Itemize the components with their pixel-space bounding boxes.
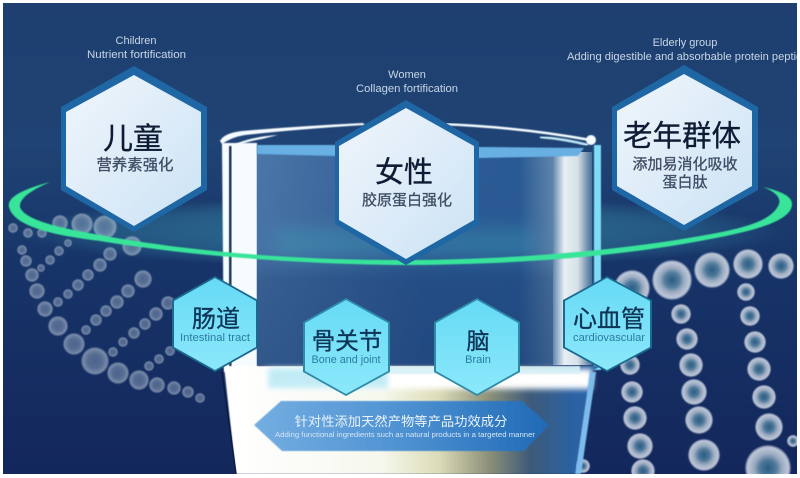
hexagon: cardiovascular: 心血管 (573, 306, 645, 333)
hexagon: bone and joint: Bone and joint (312, 354, 380, 366)
heading: women: 女性 (375, 156, 433, 189)
banner (254, 401, 549, 451)
heading: children: 儿童 (103, 123, 163, 156)
glow band behind ring (15, 196, 785, 268)
DNA helix: right (576, 249, 799, 478)
milk right wall (575, 372, 596, 474)
hexagon: bone and joint: 骨关节 (312, 328, 382, 354)
caption: elderly (567, 37, 800, 63)
heading: elderly: 老年群体 (623, 120, 741, 153)
teal haze inside glass (275, 228, 535, 258)
subheading: children: 营养素强化 (97, 156, 173, 174)
water line band (257, 145, 584, 158)
green orbit ring (9, 182, 792, 265)
DNA helix: left (8, 213, 205, 403)
hexagon: intestinal tract: Intestinal tract (180, 332, 250, 344)
banner: Adding functional ingredients such as natural products in a targeted manner (275, 432, 536, 439)
hexagon: brain: Brain (465, 354, 491, 366)
hexagon: intestinal tract: 肠道 (192, 306, 240, 333)
caption: women (356, 69, 458, 95)
banner: 针对性添加天然产物等产品功效成分 (295, 413, 507, 429)
caption: children (87, 35, 186, 61)
hexagon: brain (434, 298, 520, 396)
hexagon: cardiovascular: cardiovascular (573, 332, 645, 344)
caption: elderly: Elderly group (653, 37, 717, 49)
milk (224, 366, 600, 474)
caption: women: Women (388, 69, 426, 81)
hexagon: elderly (612, 65, 758, 231)
subheading line 2: elderly: 蛋白肽 (662, 174, 708, 191)
caption: children: Nutrient fortification (87, 49, 186, 61)
hexagon: cardiovascular (563, 276, 652, 372)
subheading: women: 胶原蛋白强化 (362, 192, 452, 209)
subheading: elderly: 添加易消化吸收 (632, 156, 738, 173)
hexagon: women (335, 100, 479, 265)
caption: women: Collagen fortification (356, 83, 458, 95)
hexagon: intestinal tract (172, 276, 258, 372)
caption: children: Children (116, 35, 156, 47)
hexagon: bone and joint (303, 298, 390, 396)
hexagon: children (61, 66, 207, 232)
rim (220, 123, 365, 144)
glass interior (257, 152, 593, 365)
glass of milk (220, 123, 601, 474)
milk left edge (222, 372, 236, 474)
hexagon: brain: 脑 (466, 328, 490, 354)
glass left wall (222, 143, 257, 372)
